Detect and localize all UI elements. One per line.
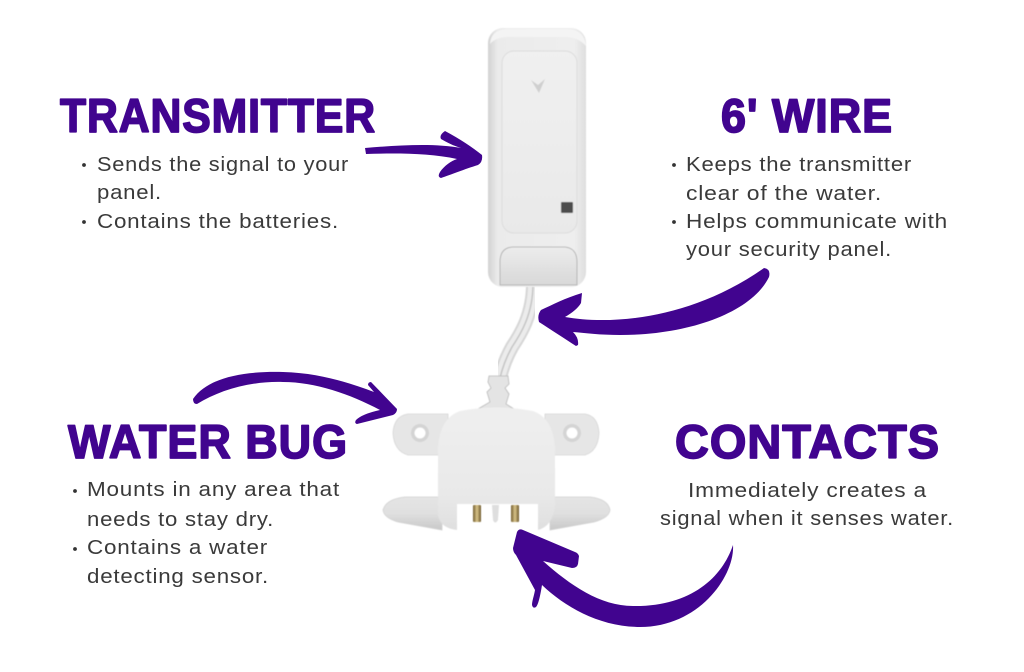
text block: transmitter bullets: Sends the signal to your xyxy=(97,154,349,176)
text block: water bug bullets xyxy=(73,479,340,588)
arrow: to transmitter xyxy=(365,131,482,178)
icon: contact pins xyxy=(473,505,481,522)
text block: transmitter bullets: panel. xyxy=(97,182,162,204)
icon: logo mark xyxy=(531,79,545,93)
icon: indicator window xyxy=(561,202,573,213)
icon: mounting ears xyxy=(393,414,448,455)
arrow: to wire xyxy=(538,268,769,346)
text block: wire bullets: clear of the water. xyxy=(686,183,882,205)
text block: wire bullets: your security panel. xyxy=(686,239,892,261)
text block: wire bullets: Helps communicate with xyxy=(686,211,948,233)
text block: water bug bullets: Mounts in any area that xyxy=(87,479,340,501)
title: 6 foot wire: 6' WIRE xyxy=(721,89,893,142)
battery flap xyxy=(500,247,577,285)
arrow: to contacts xyxy=(513,529,733,627)
text block: contacts description xyxy=(660,480,954,530)
text block: wire bullets xyxy=(672,154,948,261)
sensor housing xyxy=(438,408,555,530)
text block: water bug bullets: detecting sensor. xyxy=(87,566,269,588)
title: contacts: CONTACTS xyxy=(675,415,940,468)
text block: water bug bullets: Contains a water xyxy=(87,537,268,559)
title: transmitter: TRANSMITTER xyxy=(60,89,376,142)
text block: water bug bullets: needs to stay dry. xyxy=(87,509,274,531)
icon: cable xyxy=(500,284,533,378)
title: water bug: WATER BUG xyxy=(68,415,348,468)
text block: transmitter bullets: Contains the batteries. xyxy=(97,211,339,233)
water bug sensor xyxy=(383,376,610,530)
icon: lower flanges xyxy=(383,497,442,530)
arrow: to water bug xyxy=(193,372,397,424)
text block: wire bullets: Keeps the transmitter xyxy=(686,154,912,176)
text block: contacts description: signal when it senses water. xyxy=(660,508,954,530)
text block: transmitter bullets xyxy=(82,154,349,233)
transmitter device xyxy=(488,28,586,287)
text block: contacts description: Immediately creates a xyxy=(688,480,927,502)
icon: strain relief xyxy=(478,376,514,409)
